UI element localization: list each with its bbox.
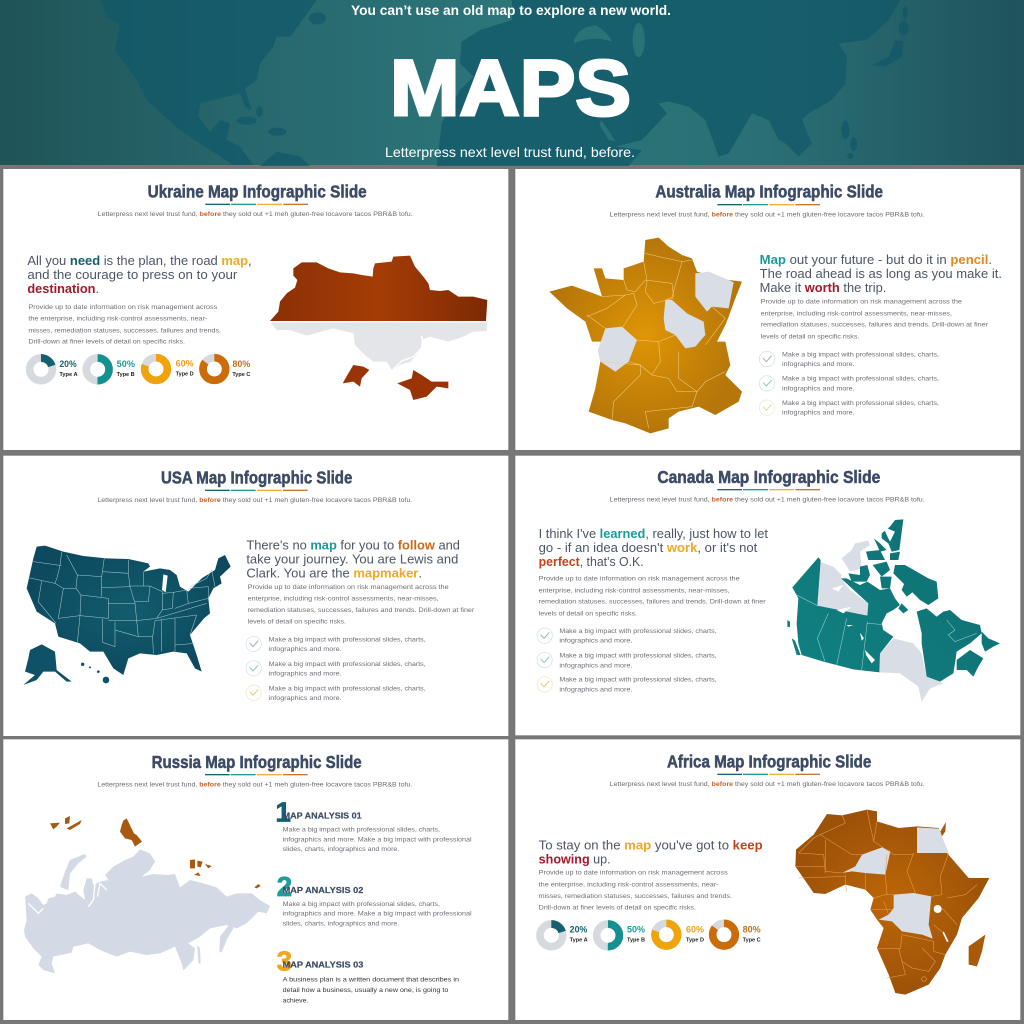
- item 1: 1: [275, 797, 291, 828]
- donut: Type B 50%: [86, 358, 135, 381]
- donut: Type C 80%: [203, 358, 250, 380]
- body text: Provide up to date information on risk management across the: [539, 576, 740, 583]
- item 3: [277, 945, 459, 1005]
- body text: [539, 870, 732, 911]
- item 2: infographics and more. Make a big impact with professional: [283, 911, 472, 918]
- quote: showing up.: [539, 852, 611, 867]
- donut: Type D 60%: 60%: [176, 359, 194, 369]
- check item 1: infographics and more.: [782, 361, 855, 368]
- map: Ukraine: [270, 256, 487, 400]
- islands: [50, 816, 261, 888]
- body text: Provide up to date information on risk management across the: [248, 584, 449, 591]
- heading underline: [205, 204, 308, 205]
- checklist: [537, 628, 717, 693]
- body text: the enterprise, including risk-control assessments, near-: [28, 316, 207, 323]
- body text: Drill-down at finer levels of detail on specific risks.: [28, 339, 185, 346]
- subheading: Letterpress next level trust fund, before they sold out +1 meh gluten-free locavore tacos PBR&B tofu.: [610, 781, 925, 788]
- body text: remediation statuses, successes, failures and trends. Drill-down at finer: [539, 599, 767, 606]
- map: Africa: [795, 810, 989, 995]
- donut: Type C 80%: Type C: [232, 372, 250, 378]
- subheading: Letterpress next level trust fund, before they sold out +1 meh gluten-free locavore tacos PBR&B tofu.: [610, 496, 925, 503]
- body text: Provide up to date information on risk management across: [539, 870, 728, 877]
- donut: Type D 60%: Type D: [176, 372, 194, 378]
- body text: enterprise, including risk-control assessments, near-misses,: [248, 596, 439, 603]
- quote: perfect, that's O.K.: [539, 554, 644, 569]
- heading underline: [205, 490, 308, 491]
- quote: Clark. You are the mapmaker.: [246, 565, 422, 580]
- check item 1: infographics and more.: [559, 638, 632, 645]
- quote: take your journey. You are Lewis and: [246, 551, 458, 566]
- checklist: [246, 636, 426, 702]
- donut: Type C 80%: Type C: [743, 938, 761, 944]
- quote: To stay on the map you've got to keep: [539, 838, 763, 853]
- check item 2: Make a big impact with professional slides, charts,: [269, 661, 426, 668]
- donut: Type B 50%: Type B: [117, 372, 135, 378]
- donut charts: [30, 358, 250, 381]
- item 3: 3: [277, 945, 292, 976]
- heading: Ukraine Map Infographic Slide: [148, 181, 367, 201]
- check item 1: [759, 351, 939, 368]
- quote: [539, 526, 768, 569]
- subheading: Letterpress next level trust fund, before they sold out +1 meh gluten-free locavore tacos PBR&B tofu.: [97, 781, 412, 788]
- quote: Make it worth the trip.: [760, 280, 886, 295]
- donut: Type A 20%: Type A: [59, 372, 78, 378]
- subtitle: Letterpress next level trust fund, before.: [385, 144, 635, 160]
- check item 3: Make a big impact with professional slides, charts,: [782, 400, 939, 407]
- check item 2: infographics and more.: [559, 662, 632, 669]
- body text: [248, 584, 475, 626]
- quote: [246, 537, 460, 580]
- item 2: Make a big impact with professional slides, charts,: [283, 901, 440, 908]
- item 3: achieve.: [283, 998, 308, 1005]
- check item 2: [246, 661, 426, 678]
- map: France regions: [549, 238, 742, 433]
- item 1: [275, 797, 472, 853]
- donut charts: [540, 923, 761, 947]
- check item 3: infographics and more.: [559, 686, 632, 693]
- item 1: slides, charts, infographics and more.: [283, 846, 399, 853]
- check item 3: [537, 677, 717, 693]
- donut: Type D 60%: [655, 923, 704, 946]
- check item 3: [246, 685, 426, 702]
- item 2: 2: [277, 871, 292, 902]
- check item 3: infographics and more.: [782, 410, 855, 417]
- item 3: A business plan is a written document that describes in: [283, 976, 459, 983]
- item 3: detail how a business, usually a new one, is going to: [283, 987, 449, 994]
- quote: I think I've learned, really, just how to let: [539, 526, 768, 541]
- donut: Type B 50%: 50%: [627, 925, 645, 935]
- map: USA: [23, 546, 231, 685]
- donut: Type C 80%: 80%: [232, 359, 250, 369]
- subheading: Letterpress next level trust fund, before they sold out +1 meh gluten-free locavore tacos PBR&B tofu.: [97, 497, 412, 504]
- heading: Canada Map Infographic Slide: [657, 467, 880, 487]
- item 1: infographics and more. Make a big impact with professional: [283, 836, 472, 843]
- panel: Ukraine slide: [3, 169, 508, 450]
- body text: remediation statuses, successes, failures and trends. Drill-down at finer: [248, 607, 475, 614]
- check item 2: infographics and more.: [269, 671, 342, 678]
- donut: Type B 50%: Type B: [627, 938, 645, 944]
- item 2: [277, 871, 472, 927]
- item 1: MAP ANALYSIS 01: [283, 810, 362, 820]
- check item 2: infographics and more.: [782, 385, 855, 392]
- check item 2: Make a big impact with professional slides, charts,: [782, 376, 939, 383]
- quote: All you need is the plan, the road map,: [27, 253, 252, 268]
- heading: Australia Map Infographic Slide: [655, 182, 883, 202]
- map: Russia: [24, 816, 270, 973]
- check item 1: infographics and more.: [269, 646, 342, 653]
- check item 1: Make a big impact with professional slides, charts,: [782, 351, 939, 358]
- donut: Type C 80%: 80%: [743, 925, 761, 935]
- map: Canada: [787, 519, 1000, 702]
- quote: [760, 252, 1002, 295]
- body text: misses, remediation statuses, successes, failures and trends.: [539, 893, 732, 900]
- item 1: Make a big impact with professional slides, charts,: [283, 827, 440, 834]
- quote: go - if an idea doesn't work, or it's not: [539, 540, 758, 555]
- quote: The road ahead is as long as you make it.: [760, 266, 1002, 281]
- heading underline: [717, 489, 820, 490]
- quote: [539, 838, 763, 867]
- check item 1: Make a big impact with professional slides, charts,: [269, 636, 426, 643]
- quote: There's no map for you to follow and: [246, 537, 460, 552]
- donut: Type A 20%: 20%: [59, 359, 77, 369]
- donut: Type B 50%: [597, 924, 645, 947]
- check item 1: [537, 628, 717, 645]
- heading underline: [205, 774, 308, 775]
- check item 3: Make a big impact with professional slides, charts,: [559, 677, 717, 684]
- panel: Australia slide: [515, 169, 1020, 450]
- check item 3: [759, 400, 939, 417]
- body text: misses, remediation statuses, successes, failures and trends.: [28, 327, 221, 334]
- heading: Russia Map Infographic Slide: [152, 752, 362, 772]
- donut: Type D 60%: [145, 358, 194, 380]
- quote: destination.: [27, 281, 99, 296]
- donut: Type D 60%: 60%: [686, 925, 704, 935]
- check item 2: [759, 376, 939, 392]
- main title: MAPS: [390, 43, 631, 132]
- check item 1: Make a big impact with professional slides, charts,: [559, 628, 717, 635]
- body text: [28, 304, 221, 346]
- subheading: Letterpress next level trust fund, before they sold out +1 meh gluten-free locavore tacos PBR&B tofu.: [610, 211, 925, 218]
- body text: levels of detail on specific risks.: [248, 619, 346, 626]
- panel: Canada slide: [515, 456, 1020, 735]
- body text: [761, 299, 989, 340]
- subheading: Letterpress next level trust fund, before they sold out +1 meh gluten-free locavore tacos PBR&B tofu.: [98, 211, 413, 218]
- donut: Type B 50%: 50%: [117, 359, 135, 369]
- check item 1: [246, 636, 426, 653]
- body text: [539, 576, 767, 617]
- donut: Type A 20%: [30, 358, 78, 381]
- heading underline: [717, 774, 820, 775]
- panel: USA slide: [3, 456, 508, 736]
- header banner: [0, 0, 1024, 166]
- quote: [27, 253, 252, 296]
- donut: Type A 20%: 20%: [570, 925, 587, 935]
- donut: Type D 60%: Type D: [686, 938, 704, 944]
- body text: Provide up to date information on risk management across: [28, 304, 218, 311]
- panel: Russia slide: [3, 739, 508, 1020]
- donut: Type A 20%: Type A: [570, 938, 588, 944]
- body text: enterprise, including risk-control assessments, near-misses,: [539, 587, 730, 594]
- body text: remediation statuses, successes, failures and trends. Drill-down at finer: [761, 322, 989, 329]
- item 3: MAP ANALYSIS 03: [283, 959, 364, 969]
- donut: Type C 80%: [713, 923, 761, 946]
- donut: Type A 20%: [540, 924, 588, 947]
- body text: the enterprise, including risk-control assessments, near-: [539, 881, 719, 888]
- item 2: MAP ANALYSIS 02: [283, 885, 364, 895]
- heading underline: [717, 204, 820, 205]
- body text: levels of detail on specific risks.: [539, 610, 637, 617]
- body text: Provide up to date information on risk management across the: [761, 299, 962, 306]
- panel: Africa slide: [515, 739, 1020, 1020]
- body text: enterprise, including risk-control assessments, near-misses,: [761, 310, 952, 317]
- body text: Drill-down at finer levels of detail on specific risks.: [539, 904, 696, 911]
- check item 3: infographics and more.: [269, 695, 342, 702]
- quote: and the courage to press on to your: [27, 267, 238, 282]
- tagline: You can’t use an old map to explore a new world.: [351, 2, 671, 18]
- world map background: [100, 0, 909, 166]
- check item 3: Make a big impact with professional slides, charts,: [269, 685, 426, 692]
- check item 2: Make a big impact with professional slides, charts,: [559, 653, 717, 660]
- check item 2: [537, 652, 717, 669]
- checklist: [759, 351, 939, 417]
- body text: levels of detail on specific risks.: [761, 333, 859, 340]
- quote: Map out your future - but do it in pencil.: [760, 252, 992, 267]
- heading: Africa Map Infographic Slide: [667, 752, 871, 772]
- heading: USA Map Infographic Slide: [161, 468, 352, 488]
- item 2: slides, charts, infographics and more.: [283, 920, 399, 927]
